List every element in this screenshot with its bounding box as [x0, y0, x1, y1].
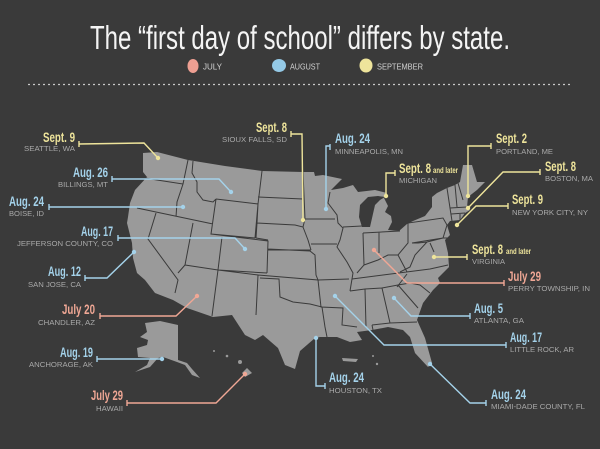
callout: Atlanta: Aug. 5	[474, 301, 503, 316]
callout: Chandler	[38, 294, 199, 327]
callout: Seattle: SEATTLE, WA	[24, 144, 76, 153]
callout: New York City: NEW YORK CITY, NY	[512, 208, 588, 217]
callout: Virginia	[432, 242, 531, 266]
callout: Billings: Aug. 26	[73, 165, 108, 180]
legend: july: JULY	[203, 62, 222, 72]
contiguous states	[127, 152, 485, 369]
callout: Little Rock: LITTLE ROCK, AR	[510, 345, 575, 354]
callout: New York City	[455, 192, 588, 227]
callout: Boise: BOISE, ID	[9, 209, 45, 218]
callout: Chandler: CHANDLER, AZ	[38, 318, 95, 327]
map: United States	[127, 152, 485, 378]
callout: Portland	[466, 131, 553, 198]
callout: Boston	[466, 159, 594, 210]
legend: september: SEPTEMBER	[377, 62, 423, 72]
legend	[188, 58, 423, 73]
callout: Houston	[314, 336, 382, 395]
callout: Miami-Dade	[428, 362, 585, 411]
callout: Michigan: Sept. 8	[399, 161, 431, 176]
callout: Little Rock	[333, 294, 575, 354]
callout: Houston: HOUSTON, TX	[329, 386, 382, 395]
callout: Perry Township	[372, 248, 590, 293]
alaska	[135, 321, 200, 378]
callout: Miami-Dade: Aug. 24	[491, 387, 526, 402]
callout: Atlanta	[392, 296, 525, 325]
callout: Chandler: July 20	[62, 302, 95, 317]
legend: september	[360, 58, 423, 72]
callout: Little Rock: Aug. 17	[510, 330, 542, 345]
legend: july	[188, 59, 222, 73]
legend: august	[272, 59, 320, 72]
callout: Minneapolis: Aug. 24	[335, 131, 370, 146]
callout: Billings	[58, 165, 233, 194]
callout: Michigan: MICHIGAN	[399, 176, 437, 185]
callout: Sioux Falls	[222, 120, 305, 222]
callout: Houston: Aug. 24	[329, 370, 364, 385]
callout: Seattle	[24, 130, 160, 160]
callout: Hawaii	[91, 372, 247, 413]
callout: Virginia: Sept. 8	[472, 242, 503, 257]
callout: Anchorage	[29, 345, 164, 369]
callout: Sioux Falls: Sept. 8	[256, 120, 287, 135]
callout: Michigan: and later	[433, 166, 458, 175]
callout: Boise	[9, 194, 185, 218]
callout: Portland: PORTLAND, ME	[496, 147, 553, 156]
legend: august: AUGUST	[290, 62, 320, 72]
callout: Atlanta: ATLANTA, GA	[474, 316, 525, 325]
callout: Michigan	[384, 161, 458, 198]
callout: Virginia: and later	[506, 247, 531, 256]
callout: Hawaii: July 29	[91, 388, 123, 403]
puerto rico and islands	[342, 355, 378, 365]
callout: Minneapolis	[324, 131, 403, 211]
callout: Anchorage: ANCHORAGE, AK	[29, 360, 93, 369]
callout: Anchorage: Aug. 19	[60, 345, 93, 360]
callout: Boston: Sept. 8	[545, 159, 576, 174]
callout: Perry Township: PERRY TOWNSHIP, IN	[508, 284, 590, 293]
callout: Jefferson County: JEFFERSON COUNTY, CO	[17, 239, 113, 248]
callout: Hawaii: HAWAII	[96, 404, 123, 413]
callout: Sioux Falls: SIOUX FALLS, SD	[222, 135, 288, 144]
callout: Minneapolis: MINNEAPOLIS, MN	[335, 147, 403, 156]
callout: Seattle: Sept. 9	[43, 130, 75, 145]
callout: San Jose: Aug. 12	[48, 264, 81, 279]
callout: Jefferson County: Aug. 17	[81, 224, 113, 239]
callout: Perry Township: July 29	[508, 269, 541, 284]
callout: Billings: BILLINGS, MT	[58, 180, 108, 189]
callout: Boise: Aug. 24	[9, 194, 44, 209]
callout: Portland: Sept. 2	[496, 131, 527, 146]
callout: Boston: BOSTON, MA	[545, 174, 594, 183]
callout: Miami-Dade: MIAMI-DADE COUNTY, FL	[491, 402, 585, 411]
callout: San Jose	[28, 250, 136, 289]
callout: New York City: Sept. 9	[512, 192, 543, 207]
callout: Virginia: VIRGINIA	[472, 257, 506, 266]
callout: San Jose: SAN JOSE, CA	[28, 280, 82, 289]
hawaii	[213, 350, 252, 377]
callout: Jefferson County	[17, 224, 247, 251]
